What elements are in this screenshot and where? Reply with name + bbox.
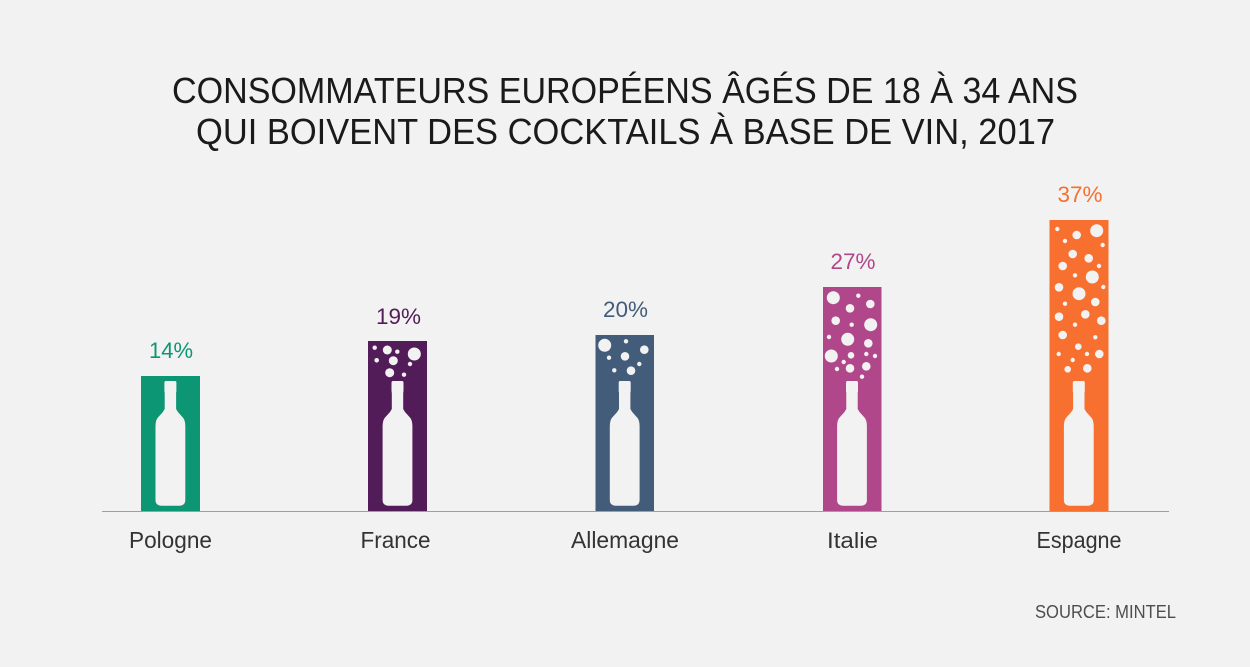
percentage: Pologne: 14% — [149, 338, 193, 363]
icon: wine bottle — [837, 381, 867, 506]
icon: wine bottle — [610, 381, 640, 506]
bar: Allemagne — [596, 335, 654, 511]
bar: France — [368, 341, 427, 511]
axis line — [102, 511, 1169, 512]
bar: Pologne — [141, 376, 200, 511]
country label: Espagne: Espagne — [1036, 527, 1122, 553]
title: QUI BOIVENT DES COCKTAILS À BASE DE VIN, 2017 — [196, 111, 1055, 152]
icon: wine bottle — [156, 381, 185, 506]
column: France — [360, 304, 430, 553]
column: Pologne — [129, 338, 212, 553]
icon: wine bottle — [383, 381, 412, 506]
bubbles: France — [372, 346, 421, 377]
percentage: Italie: 27% — [830, 249, 876, 274]
icon: wine bottle — [1064, 381, 1094, 506]
bar: Espagne — [1050, 220, 1108, 511]
country label: Italie: Italie — [827, 528, 878, 553]
column: Allemagne — [571, 297, 679, 553]
column: Espagne — [1036, 182, 1122, 553]
title: CONSOMMATEURS EUROPÉENS ÂGÉS DE 18 À 34 ANS — [172, 70, 1078, 111]
bar chart — [102, 182, 1169, 553]
source note: SOURCE: MINTEL — [1035, 602, 1176, 622]
country label: Pologne: Pologne — [129, 527, 212, 553]
bar: Italie — [823, 287, 882, 511]
percentage: France: 19% — [376, 304, 421, 329]
bubbles: Espagne — [1055, 224, 1106, 373]
country label: France: France — [360, 527, 430, 553]
percentage: Allemagne: 20% — [603, 297, 648, 322]
percentage: Espagne: 37% — [1058, 182, 1102, 207]
bubbles: Allemagne — [598, 339, 649, 375]
title — [172, 70, 1078, 152]
bubbles: Italie — [825, 291, 877, 379]
country label: Allemagne: Allemagne — [571, 527, 679, 553]
column: Italie — [823, 249, 882, 553]
